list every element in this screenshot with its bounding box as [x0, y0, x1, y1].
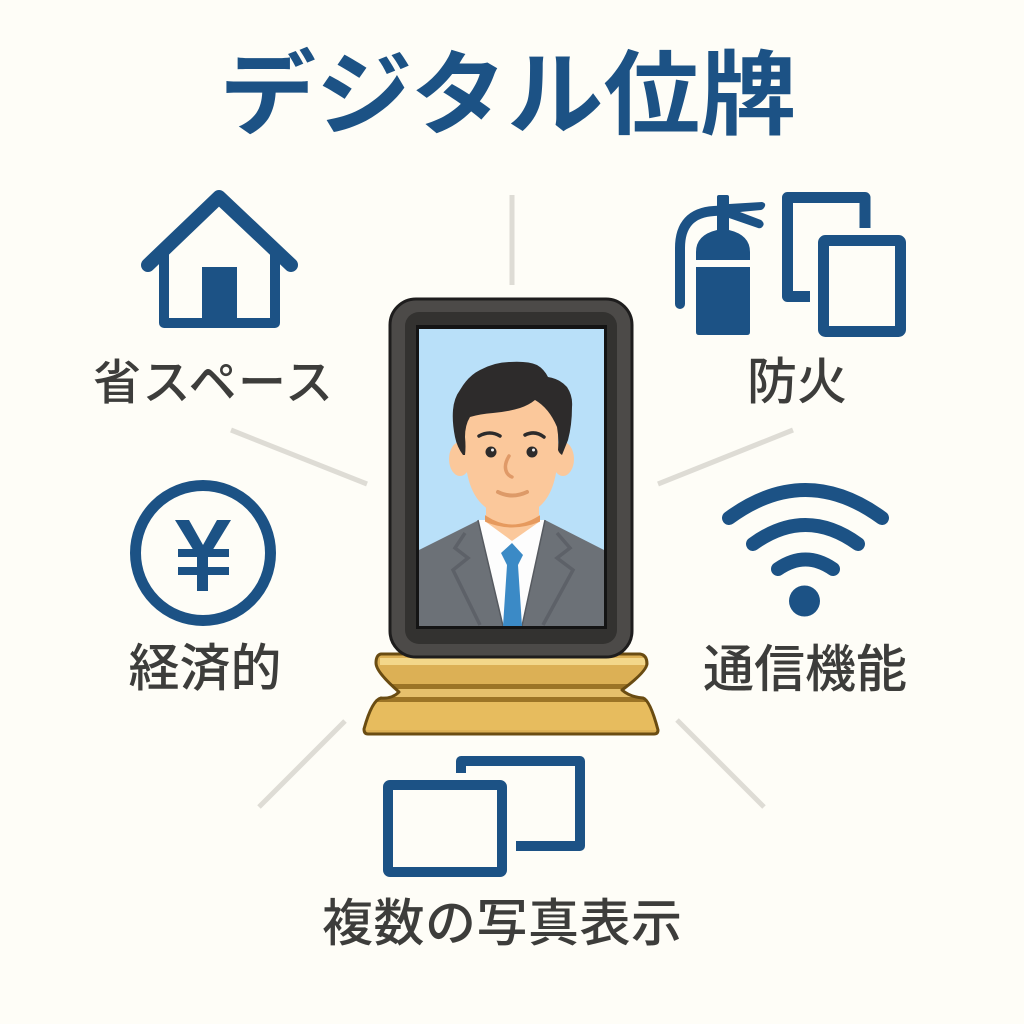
digital memorial tablet — [360, 299, 664, 740]
frame — [390, 299, 632, 657]
mouth — [498, 492, 527, 496]
label: multiple photos: 複数の写真表示 — [322, 895, 682, 952]
jacket — [419, 520, 604, 626]
icon: house — [148, 197, 291, 323]
hair — [453, 362, 572, 455]
title: デジタル位牌 — [220, 45, 796, 147]
eyebrows — [479, 433, 544, 437]
icon: fire extinguisher — [680, 195, 765, 335]
icon: stacked photos — [388, 761, 580, 872]
label: fire prevention: 防火 — [747, 354, 847, 410]
nose — [505, 456, 512, 477]
label: communication: 通信機能 — [703, 641, 907, 698]
photo screen — [419, 329, 604, 626]
face — [465, 400, 558, 508]
ears — [449, 443, 467, 476]
stand — [360, 650, 664, 740]
eyes — [486, 446, 496, 458]
label: economical: 経済的 — [128, 640, 282, 697]
portrait — [419, 362, 604, 626]
lapels — [453, 533, 573, 625]
shirt — [478, 520, 545, 626]
icon: yen coin — [136, 486, 270, 620]
icon: wifi — [729, 490, 882, 616]
tie — [501, 543, 523, 626]
label: space saving: 省スペース — [93, 357, 333, 410]
neck — [486, 507, 539, 541]
icon: fire copy pages — [788, 198, 900, 332]
